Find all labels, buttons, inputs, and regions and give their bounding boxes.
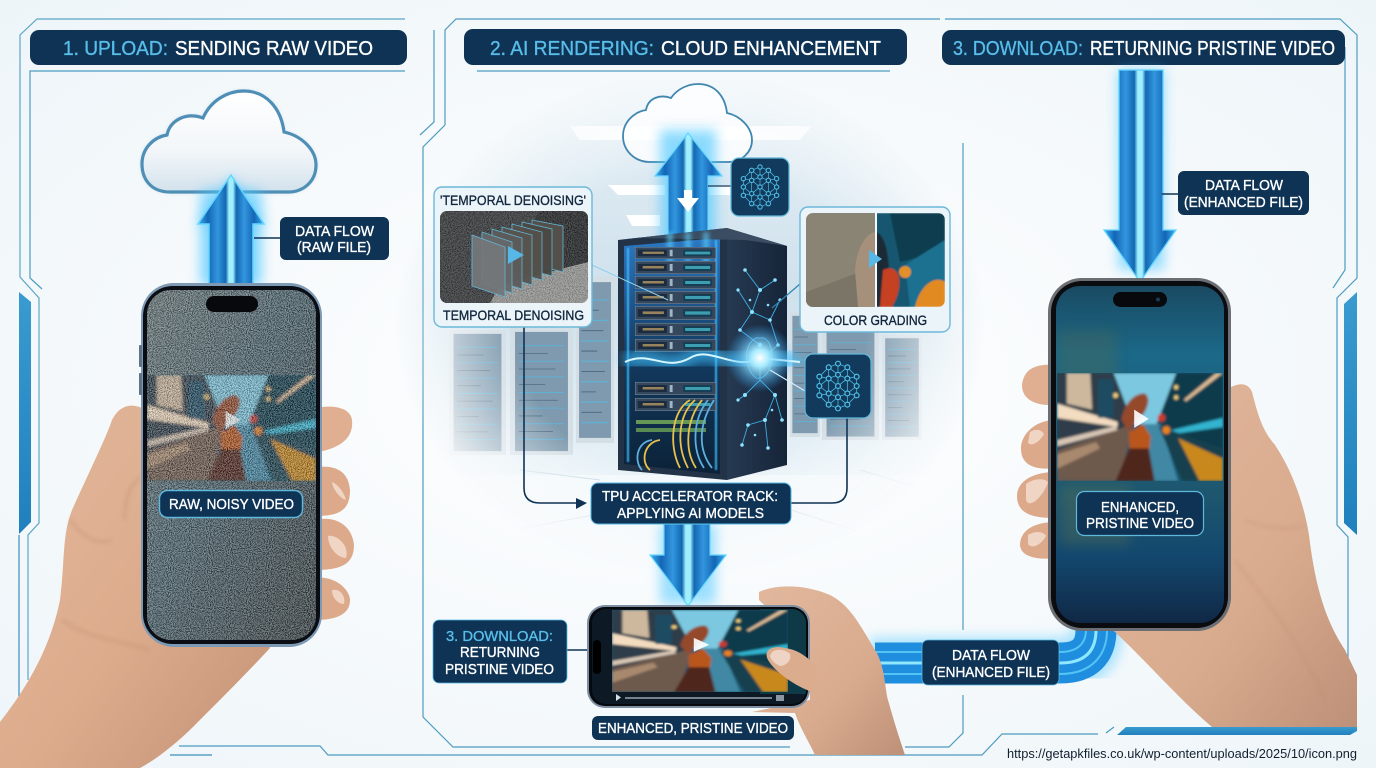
label: TPU accelerator rack: [591, 483, 791, 524]
label: enhanced pristine video: PRISTINE VIDEO: [1086, 516, 1194, 532]
frame: left blue accent bar: [19, 292, 31, 534]
phone: enhanced pristine video: [1048, 278, 1231, 631]
icon: neural network right: [805, 354, 871, 418]
hand behind landscape phone: [752, 586, 905, 755]
source url: https://getapkfiles.co.uk/wp-content/uploads/2025/10/icon.png: [1007, 746, 1357, 761]
panel 2 heading: CLOUD ENHANCEMENT: [661, 38, 881, 60]
frame: center panel outline: [420, 19, 963, 747]
callout: data flow raw file: DATA FLOW: [295, 224, 374, 240]
rack cables: [637, 400, 714, 470]
rack side neural pattern: [738, 270, 782, 448]
left hand holding phone: [0, 406, 354, 768]
arrow: enhanced data flow down: [1104, 70, 1176, 282]
callout: download returning pristine video: PRISTINE VIDEO: [445, 662, 554, 678]
image: before and after split: [806, 213, 945, 307]
callout: data flow enhanced file top: (ENHANCED FILE): [1184, 195, 1303, 211]
callout: color grading: [800, 207, 950, 332]
panel 1 heading: [30, 30, 407, 65]
callout: data flow raw file: [254, 217, 389, 260]
label: enhanced pristine video: ENHANCED,: [1101, 500, 1179, 516]
phone: raw noisy video: [139, 283, 322, 647]
panel 3 heading: RETURNING PRISTINE VIDEO: [1090, 38, 1335, 60]
panel 3 heading: [942, 30, 1345, 65]
image: frame stack: [440, 211, 588, 303]
label: enhanced pristine video: [1076, 492, 1204, 536]
callout: data flow raw file: (RAW FILE): [297, 240, 371, 256]
arrow: center data up with inner down arrow: [655, 130, 722, 250]
panel 2 heading: 2. AI RENDERING:: [490, 38, 654, 60]
callout: color grading: COLOR GRADING: [824, 312, 927, 328]
frame: right blue accent bar and bottom bar: [1117, 292, 1357, 735]
callout: download returning pristine video: RETURNING: [460, 645, 540, 661]
thumb over landscape phone: [767, 647, 820, 692]
energy beam and flare: [625, 324, 800, 392]
panel 3 heading: 3. DOWNLOAD:: [953, 38, 1083, 60]
rack: TPU accelerator: [618, 228, 800, 480]
rack server units: [635, 247, 716, 411]
callout: data flow enhanced file top: [1162, 171, 1309, 215]
panel 1 heading: SENDING RAW VIDEO: [175, 38, 373, 60]
arrow: bottom data flow curve into right phone: [870, 625, 1107, 674]
label: raw noisy video: [160, 490, 302, 518]
background: data center room: [420, 114, 964, 526]
frame: right panel outline and bottom rail: [838, 19, 1357, 755]
callout: temporal denoising: TEMPORAL DENOISING: [443, 307, 584, 323]
callout: temporal denoising: [434, 187, 592, 327]
arrow: center data flow down: [650, 524, 726, 606]
icon: center cloud: [623, 84, 752, 162]
label: raw noisy video: RAW, NOISY VIDEO: [169, 497, 294, 513]
label: enhanced pristine video bottom: ENHANCED, PRISTINE VIDEO: [598, 721, 788, 737]
icon: upload cloud: [142, 91, 316, 192]
panel 2 heading: [464, 29, 907, 65]
phone: landscape enhanced video: [587, 605, 810, 708]
icon: neural network top: [731, 158, 789, 216]
label: TPU accelerator rack: TPU ACCELERATOR RACK:: [602, 488, 778, 505]
callout: download returning pristine video: 3. DOWNLOAD:: [446, 629, 553, 645]
arrow: raw data flow up: [196, 175, 266, 285]
callout: download returning pristine video: [433, 620, 587, 683]
panel 1 heading: 1. UPLOAD:: [63, 38, 168, 60]
callout: temporal denoising: 'TEMPORAL DENOISING': [440, 192, 586, 208]
label: TPU accelerator rack: APPLYING AI MODELS: [617, 505, 764, 522]
callout: data flow enhanced file top: DATA FLOW: [1205, 178, 1283, 194]
callout: data flow enhanced file bottom: (ENHANCED FILE): [932, 665, 1050, 681]
callout: data flow enhanced file bottom: DATA FLOW: [952, 648, 1030, 664]
label: enhanced pristine video bottom: [592, 716, 794, 740]
callout: data flow enhanced file bottom: [922, 640, 1059, 685]
right hand holding phone: [1017, 365, 1357, 727]
frame: left panel outline: [19, 19, 838, 755]
connector lines to rack label: [524, 186, 847, 509]
